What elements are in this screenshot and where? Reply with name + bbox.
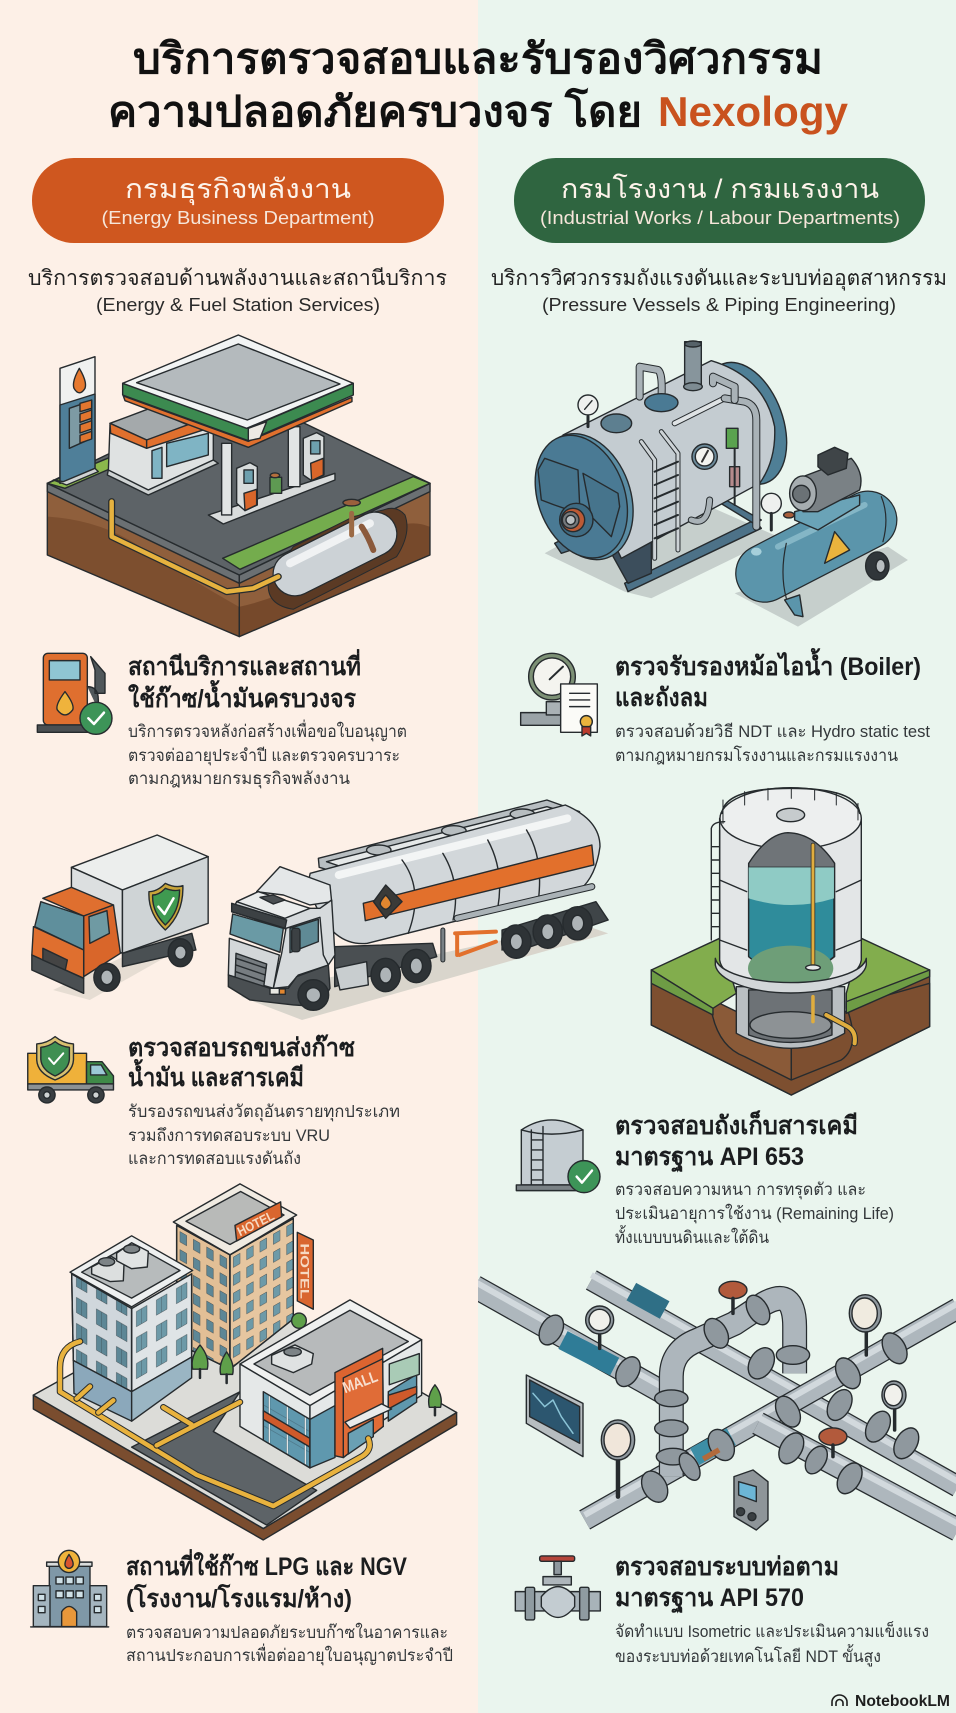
card heading: สถานที่ใช้ก๊าซ LPG และ NGV: [126, 1549, 407, 1581]
illustration: storage tank cross-section: [651, 788, 930, 1095]
card heading: [126, 1549, 407, 1613]
card description: บริการตรวจหลังก่อสร้างเพื่อขอใบอนุญาต: [128, 719, 407, 742]
icon: gate valve: [515, 1556, 600, 1620]
card description: [126, 1622, 453, 1666]
icon: gauge and certificate: [521, 653, 597, 736]
title: Nexology: [658, 88, 849, 135]
card heading: ใช้ก๊าซ/น้ำมันครบวงจร: [128, 679, 357, 713]
card heading: (โรงงาน/โรงแรม/ห้าง): [126, 1583, 352, 1613]
card description: [128, 719, 407, 789]
section heading: pressure vessels and piping: (Pressure Vessels & Piping Engineering): [542, 295, 896, 315]
illustration: hotel, office and mall with gas pipes: [33, 1184, 457, 1540]
card: LPG and NGV premises: [31, 1549, 453, 1666]
title: บริการตรวจสอบและรับรองวิศวกรรม: [133, 35, 823, 82]
card heading: [615, 1110, 858, 1173]
card description: ตรวจต่ออายุประจำปี และตรวจครบวาระ: [128, 746, 400, 766]
card heading: [128, 1034, 355, 1092]
watermark: NotebookLM: NotebookLM: [855, 1693, 950, 1710]
card description: ตรวจสอบความปลอดภัยระบบก๊าซในอาคารและ: [126, 1622, 448, 1642]
card description: ประเมินอายุการใช้งาน (Remaining Life): [615, 1203, 894, 1224]
card: chemical storage tank: [516, 1110, 894, 1247]
department pill: industrial works and labour: (Industrial Works / Labour Departments): [540, 208, 900, 228]
card description: [615, 1180, 894, 1247]
icon: fuel pump with check: [37, 653, 112, 734]
card description: ตามกฎหมายกรมธุรกิจพลังงาน: [128, 769, 350, 789]
card heading: ตรวจสอบถังเก็บสารเคมี: [615, 1110, 858, 1140]
department pill: energy business: [32, 158, 444, 243]
illustration: gas station: [47, 335, 430, 637]
illustration: hotel, office and mall with gas pipes: HOTEL: [235, 1208, 277, 1239]
icon: truck with shield: [28, 1037, 113, 1103]
illustration: hotel, office and mall with gas pipes: MALL: [341, 1368, 380, 1397]
card: service stations: [37, 649, 407, 789]
card description: ตรวจสอบความหนา การทรุดตัว และ: [615, 1180, 866, 1200]
section heading: energy and fuel: บริการตรวจสอบด้านพลังงานและสถานีบริการ: [28, 267, 447, 290]
title: [108, 35, 849, 135]
section heading: energy and fuel: (Energy & Fuel Station Services): [96, 295, 380, 315]
card description: ตรวจสอบด้วยวิธี NDT และ Hydro static test: [615, 722, 930, 741]
department pill: industrial works and labour: กรมโรงงาน / กรมแรงงาน: [561, 174, 879, 204]
department pill: energy business: กรมธุรกิจพลังงาน: [125, 174, 351, 206]
card: transport vehicles: [28, 1034, 400, 1168]
card heading: ตรวจรับรองหม้อไอน้ำ (Boiler): [615, 647, 921, 681]
card description: จัดทำแบบ Isometric และประเมินความแข็งแรง: [615, 1620, 929, 1641]
card: boiler: [521, 647, 930, 765]
card description: รับรองรถขนส่งวัตถุอันตรายทุกประเภท: [128, 1102, 400, 1122]
department pill: energy business: (Energy Business Department): [102, 208, 374, 228]
card description: [128, 1102, 400, 1168]
section heading: energy and fuel: [28, 267, 447, 315]
background: right panel: [478, 0, 956, 1713]
card heading: [615, 1553, 839, 1614]
card description: รวมถึงการทดสอบระบบ VRU: [128, 1126, 330, 1145]
card description: ของระบบท่อด้วยเทคโนโลยี NDT ขั้นสูง: [615, 1644, 881, 1667]
card heading: [128, 649, 361, 713]
background: left panel: [0, 0, 478, 1713]
card description: [615, 722, 930, 765]
illustration: boiler and air compressor: [519, 341, 908, 627]
icon: building with flame badge: [31, 1550, 109, 1627]
card description: สถานประกอบการเพื่อต่ออายุใบอนุญาตประจำปี: [126, 1643, 453, 1666]
card heading: ตรวจสอบระบบท่อตาม: [615, 1553, 839, 1581]
card: piping inspection: [515, 1553, 929, 1667]
illustration: hotel, office and mall with gas pipes: HOTEL: [298, 1243, 311, 1300]
section heading: pressure vessels and piping: [491, 267, 947, 315]
card heading: สถานีบริการและสถานที่: [128, 649, 361, 681]
card heading: [615, 647, 921, 712]
card heading: และถังลม: [615, 684, 708, 712]
card heading: มาตรฐาน API 653: [615, 1143, 804, 1173]
card description: และการทดสอบแรงดันถัง: [128, 1149, 301, 1168]
department pill: industrial works and labour: [514, 158, 925, 243]
card heading: มาตรฐาน API 570: [615, 1584, 804, 1614]
title: ความปลอดภัยครบวงจร โดย: [108, 87, 642, 135]
card heading: น้ำมัน และสารเคมี: [128, 1058, 304, 1092]
card description: ทั้งแบบบนดินและใต้ดิน: [615, 1225, 769, 1247]
card description: [615, 1620, 929, 1667]
card description: ตามกฎหมายกรมโรงงานและกรมแรงงาน: [615, 745, 898, 765]
card heading: ตรวจสอบรถขนส่งก๊าซ: [128, 1034, 355, 1062]
section heading: pressure vessels and piping: บริการวิศวกรรมถังแรงดันและระบบท่ออุตสาหกรรม: [491, 267, 947, 291]
icon: storage tank with check: [516, 1120, 600, 1193]
illustration: isometric piping system: [475, 1275, 956, 1530]
illustration: delivery truck and tanker: [32, 800, 608, 1020]
